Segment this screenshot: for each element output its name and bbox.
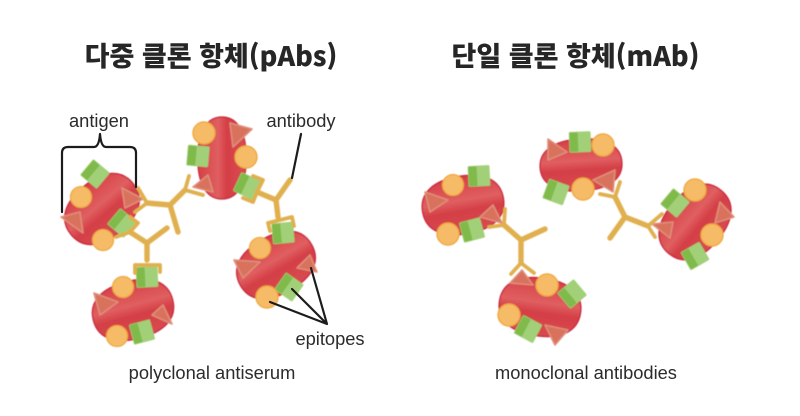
antigen: left xyxy=(418,165,508,245)
antigen: bottom xyxy=(495,270,586,345)
diagram: polyclonal antiserum xyxy=(53,117,326,349)
antibody: right xyxy=(243,176,294,231)
antibody: upper left xyxy=(135,176,203,232)
label: antibody with leader: antibody xyxy=(266,110,336,131)
antigen: top xyxy=(538,132,624,205)
title: monoclonal: 단일 클론 항체(mAb) xyxy=(452,35,700,74)
antibody: lower left xyxy=(116,217,167,273)
antigen: top centre xyxy=(187,117,261,200)
label: antigen with bracket: antigen xyxy=(69,110,129,131)
antigen: left xyxy=(53,160,151,257)
antibody: left xyxy=(489,209,545,274)
diagram: monoclonal antibodies xyxy=(418,132,744,345)
label: epitopes with leaders xyxy=(270,268,365,349)
label: antigen with bracket xyxy=(62,110,136,212)
antibody: right xyxy=(600,182,662,238)
caption: polyclonal antiserum: polyclonal antiserum xyxy=(129,362,295,383)
antigen: right xyxy=(646,172,744,272)
antigen: bottom left xyxy=(86,266,180,349)
caption: monoclonal antibodies: monoclonal antibodies xyxy=(495,362,677,383)
label: antibody with leader xyxy=(266,110,336,178)
title: polyclonal: 다중 클론 항체(pAbs) xyxy=(85,35,337,74)
antigen: right xyxy=(226,219,326,311)
label: epitopes with leaders: epitopes xyxy=(295,328,365,349)
